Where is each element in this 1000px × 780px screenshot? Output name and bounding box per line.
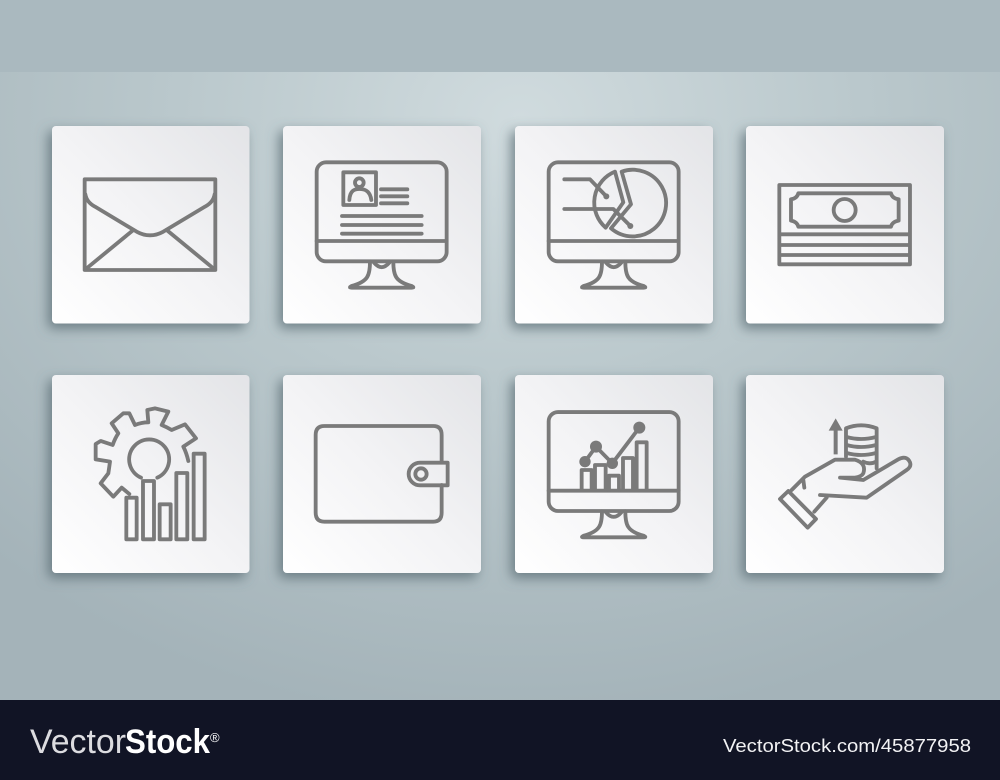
panel: monitor with profile [283, 126, 481, 324]
top background strip [0, 0, 1000, 72]
logo: VectorStock: ® [210, 730, 220, 745]
logo: VectorStock: Vector [30, 723, 126, 761]
image id text: VectorStock.com/45877958 [723, 736, 971, 756]
panel: envelope [52, 126, 250, 324]
icon: envelope [85, 179, 215, 270]
icon: gear with bar chart [96, 408, 205, 539]
logo: VectorStock: Stock [125, 723, 210, 761]
panel: monitor with pie chart [515, 126, 713, 324]
panel: gear with bars [52, 375, 250, 573]
panel: banknotes [746, 126, 944, 324]
panel: monitor with growth chart [515, 375, 713, 573]
icon: monitor with pie chart [549, 162, 679, 288]
logo: VectorStock [30, 723, 220, 761]
panel: hand with coins [746, 375, 944, 573]
bottom bar [0, 700, 1000, 780]
icon: monitor with profile [317, 162, 447, 288]
icon: stack of banknotes [779, 185, 910, 264]
panel: wallet [283, 375, 481, 573]
icon: hand holding coins with up arrow [780, 418, 910, 528]
icon: wallet [316, 426, 448, 522]
icon: monitor with growth chart [549, 412, 679, 537]
